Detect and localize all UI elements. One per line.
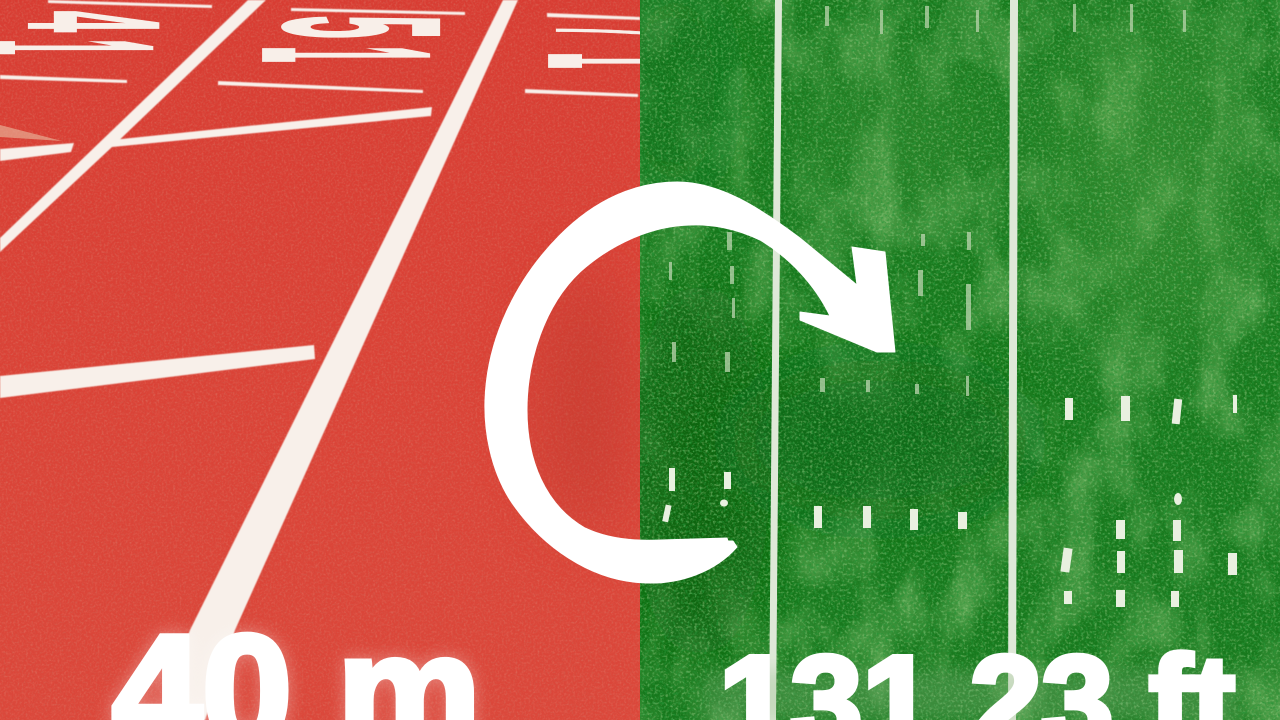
lane number 14 bbox=[0, 11, 160, 54]
decorative marking on left lane bbox=[0, 125, 62, 141]
grass surface bbox=[630, 0, 1280, 720]
lane number 15: 1 bbox=[218, 47, 475, 62]
lane number 15 bbox=[262, 16, 440, 62]
lane number 17: 1 bbox=[502, 53, 767, 68]
panel: running track bbox=[0, 0, 640, 720]
track lane lines bbox=[0, 0, 640, 720]
lane number 17: 7 bbox=[514, 26, 738, 37]
track surface bbox=[0, 0, 640, 720]
smudge behind value bbox=[705, 670, 1235, 720]
hash marks: middle group bbox=[669, 232, 971, 396]
panel: football field bbox=[630, 0, 1280, 720]
hash marks: lower group bbox=[662, 395, 1237, 607]
hash marks: top row bbox=[825, 4, 1186, 34]
lane number 15: 5 bbox=[239, 16, 485, 38]
lane number 17 bbox=[548, 28, 640, 68]
arrow: curved conversion arrow from track to field bbox=[485, 182, 895, 583]
yard lines bbox=[769, 0, 1018, 720]
